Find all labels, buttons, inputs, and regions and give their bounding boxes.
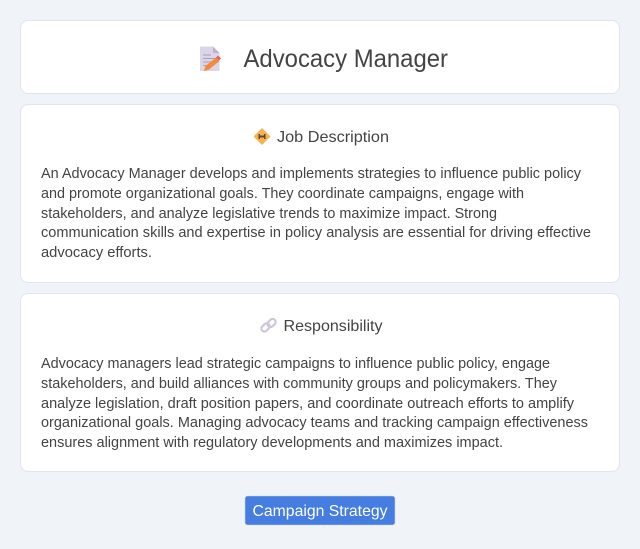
job description text: stakeholders, and analyze legislative trends to maximize impact. Strong — [41, 206, 497, 222]
panel: title card — [20, 20, 620, 94]
responsibility text: ensures alignment with regulatory developments and maximizes impact. — [41, 435, 503, 451]
job description text: advocacy efforts. — [41, 245, 152, 261]
job description text — [41, 166, 591, 261]
heading: responsibility: Responsibility — [284, 318, 382, 335]
responsibility text: Advocacy managers lead strategic campaigns to influence public policy, engage — [41, 356, 550, 372]
job description text: An Advocacy Manager develops and implements strategies to influence public policy — [41, 166, 582, 182]
button: campaign strategy — [245, 496, 395, 525]
responsibility text — [41, 356, 588, 451]
icon: chain link — [260, 318, 277, 333]
job description text: and promote organizational goals. They coordinate campaigns, engage with — [41, 186, 524, 202]
icon: orange diamond sign — [254, 129, 270, 144]
icon: document with pencil — [200, 46, 221, 71]
panel: job description card — [20, 104, 620, 283]
heading: job description: Job Description — [277, 129, 389, 146]
responsibility text: analyze legislation, draft position papers, and coordinate outreach efforts to amplify — [41, 396, 575, 412]
button: campaign strategy: Campaign Strategy — [252, 503, 388, 520]
responsibility text: organizational goals. Managing advocacy teams and tracking campaign effectiveness — [41, 415, 588, 431]
title: Advocacy Manager — [244, 45, 448, 73]
job description text: communication skills and expertise in policy analysis are essential for driving effective — [41, 225, 591, 241]
panel: responsibility card — [20, 293, 620, 472]
responsibility text: stakeholders, and build alliances with community groups and policymakers. They — [41, 376, 558, 392]
